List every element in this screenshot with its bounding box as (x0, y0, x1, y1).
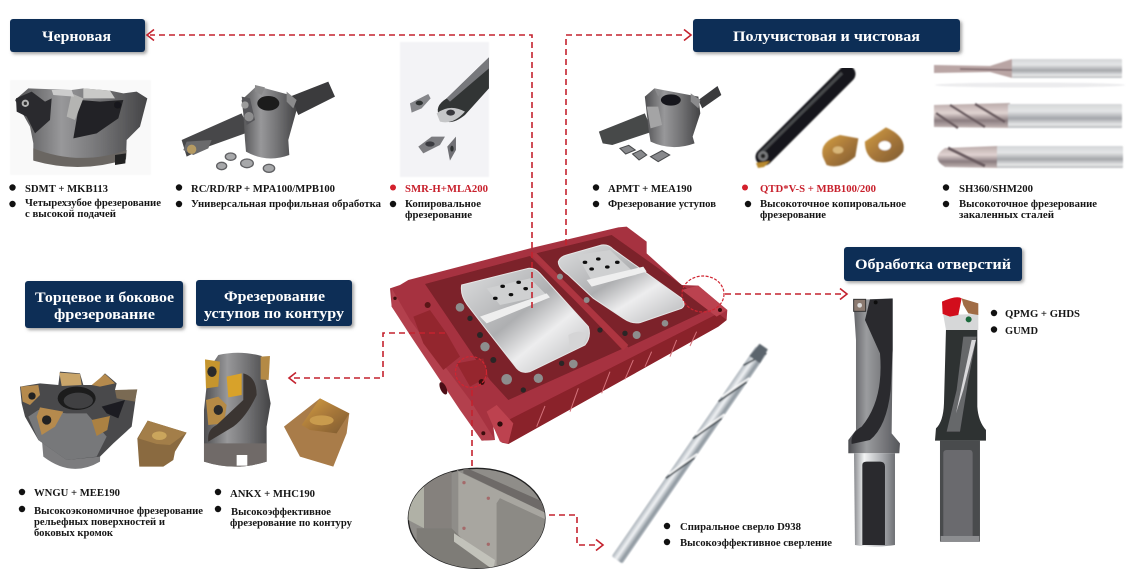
text: ANKX: фрезерование по контуру (230, 518, 353, 529)
text: RC/RD/RP: RC/RD/RP + MPA100/MPB100 (191, 184, 335, 195)
text: ANKX: ANKX + MHC190 (230, 489, 315, 500)
image: drill two (935, 297, 986, 542)
text: WNGU (19, 488, 203, 539)
text: QTD: QTD*V-S + MBB100/200 (760, 184, 876, 195)
text: SMR-H (390, 184, 488, 221)
text: RC/RD/RP (176, 184, 382, 210)
text: SDMT: Четырехзубое фрезерование (25, 198, 161, 209)
text: ANKX (215, 489, 353, 529)
panel: Получистовая и чистовая (593, 19, 1125, 221)
heading: Фрезерование уступов: уступов по контуру (204, 306, 345, 322)
text: SMR-H: SMR-H+MLA200 (405, 184, 488, 195)
heading: Обработка отверстий: Обработка отверстий (855, 257, 1011, 273)
text: SH360 (943, 184, 1097, 221)
image: face mill SDMT (10, 80, 151, 175)
image: APMT cutter (599, 86, 721, 162)
text: SH360: SH360/SHM200 (959, 184, 1033, 195)
text: APMT: Фрезерование уступов (608, 199, 716, 210)
heading: Получистовая и чистовая: Получистовая и чистовая (733, 29, 920, 45)
plate: right (558, 245, 684, 323)
text: RC/RD/RP: Универсальная профильная обработка (191, 199, 382, 210)
text: D938 (664, 522, 832, 549)
arrow: inset to drill (549, 515, 603, 550)
image: end mills SH360 (934, 59, 1125, 168)
text: QPMG: QPMG + GHDS (1005, 309, 1080, 320)
text: WNGU: WNGU + MEE190 (34, 488, 120, 499)
panel: Обработка отверстий (844, 247, 1080, 547)
text: SMR-H: Копировальное (405, 199, 481, 210)
text: APMT (593, 184, 716, 210)
text: SMR-H: фрезерование (405, 210, 472, 221)
text: QTD: фрезерование (760, 210, 826, 221)
heading: Черновая: Черновая (42, 29, 111, 45)
text: ANKX: Высокоэффективное (231, 507, 331, 518)
panel: Торцевое и боковое фрезерование (19, 281, 203, 539)
end mill: tapered (934, 59, 1122, 78)
text: D938: Спиральное сверло D938 (680, 522, 801, 533)
heading: Торцевое и боковое: Торцевое и боковое (35, 290, 174, 306)
heading: Фрезерование уступов (196, 280, 352, 326)
arrow: to hole machining (725, 288, 847, 300)
image: ball nose holder QTD (756, 73, 904, 168)
arrow: to Черновая (147, 30, 532, 308)
panel: Черновая (9, 19, 335, 220)
text: D938: Высокоэффективное сверление (680, 538, 832, 549)
image: face mill WNGU (20, 372, 137, 469)
text: WNGU: боковых кромок (34, 528, 114, 539)
end mill: four flute (934, 103, 1122, 128)
image: inset detail (408, 467, 547, 570)
panel: Фрезерование уступов по контуру (196, 280, 353, 529)
text: QTD: Высокоточное копировальное (760, 199, 906, 210)
text: APMT: APMT + MEA190 (608, 184, 692, 195)
text: QTD (742, 184, 906, 221)
heading: Черновая (10, 19, 145, 52)
image: red mould frame (390, 227, 727, 444)
text: WNGU: рельефных поверхностей и (34, 517, 165, 528)
image: twist drill D938 (612, 343, 769, 564)
image: shoulder mill ANKX (204, 353, 271, 467)
arrow: to Получистовая (566, 30, 691, 245)
image: milling cutter RC/RD/RP (182, 82, 335, 172)
circles on frame (456, 276, 724, 388)
heading: Получистовая и чистовая (693, 19, 960, 52)
end mill: ball nose (938, 146, 1123, 168)
text: QPMG (991, 309, 1080, 337)
text: QPMG: GUMD (1005, 326, 1038, 337)
image: drill one (848, 298, 900, 547)
text: WNGU: Высокоэкономичное фрезерование (34, 506, 203, 517)
image: insert WNGU (137, 421, 187, 467)
heading: Фрезерование уступов: Фрезерование (224, 289, 325, 305)
image: insert ANKX (284, 398, 349, 467)
heading: Торцевое и боковое (25, 281, 183, 328)
panel: SMR-H (390, 42, 489, 221)
arrow: to contour milling (289, 333, 445, 384)
text: SH360: Высокоточное фрезерование (959, 199, 1097, 210)
plate: left (461, 268, 589, 372)
heading: Обработка отверстий (844, 247, 1022, 281)
heading: Торцевое и боковое: фрезерование (54, 307, 155, 323)
text: SDMT: с высокой подачей (25, 209, 116, 220)
arrow: frame to inset (471, 390, 473, 467)
text: SDMT: SDMT + MKB113 (25, 184, 108, 195)
image: copy milling holder (400, 42, 489, 177)
text: SH360: закаленных сталей (959, 210, 1054, 221)
text: SDMT (9, 184, 161, 220)
